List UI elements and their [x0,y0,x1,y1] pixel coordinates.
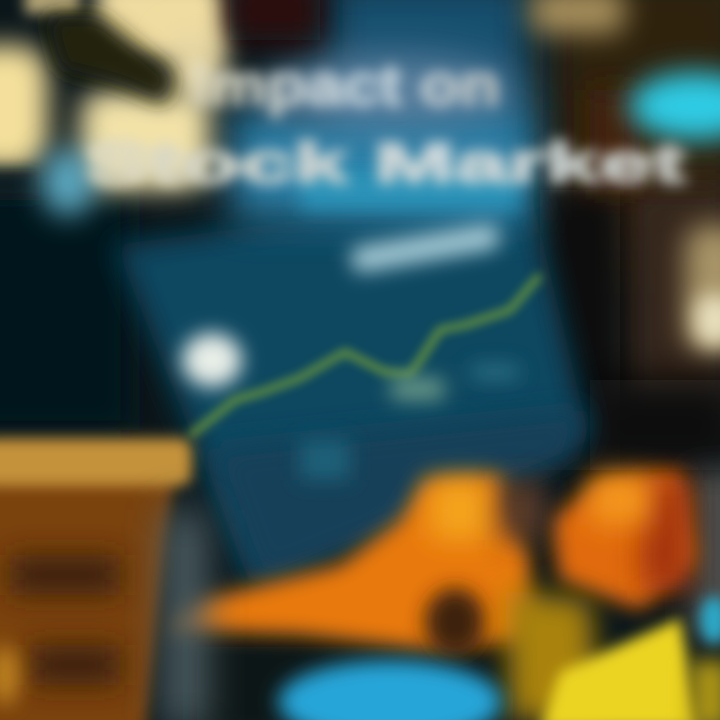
title: Stock Market [85,131,685,194]
title: Impact on [190,53,500,118]
coffee cup [0,438,192,720]
top-left warm lights [0,0,625,200]
yellow block [505,590,720,720]
cyan neon shape [629,72,720,140]
small screen label [349,222,501,274]
pale blue glow [40,148,96,216]
chart screen [115,0,590,585]
small chart highlights [300,365,520,480]
grey reflection [165,510,205,720]
orange bars [170,470,695,656]
green trend line [190,275,540,436]
title [85,53,685,194]
white chart marker [182,333,242,387]
cyan corner [700,596,720,644]
blue bowl [278,660,502,720]
right side glow [590,90,720,350]
